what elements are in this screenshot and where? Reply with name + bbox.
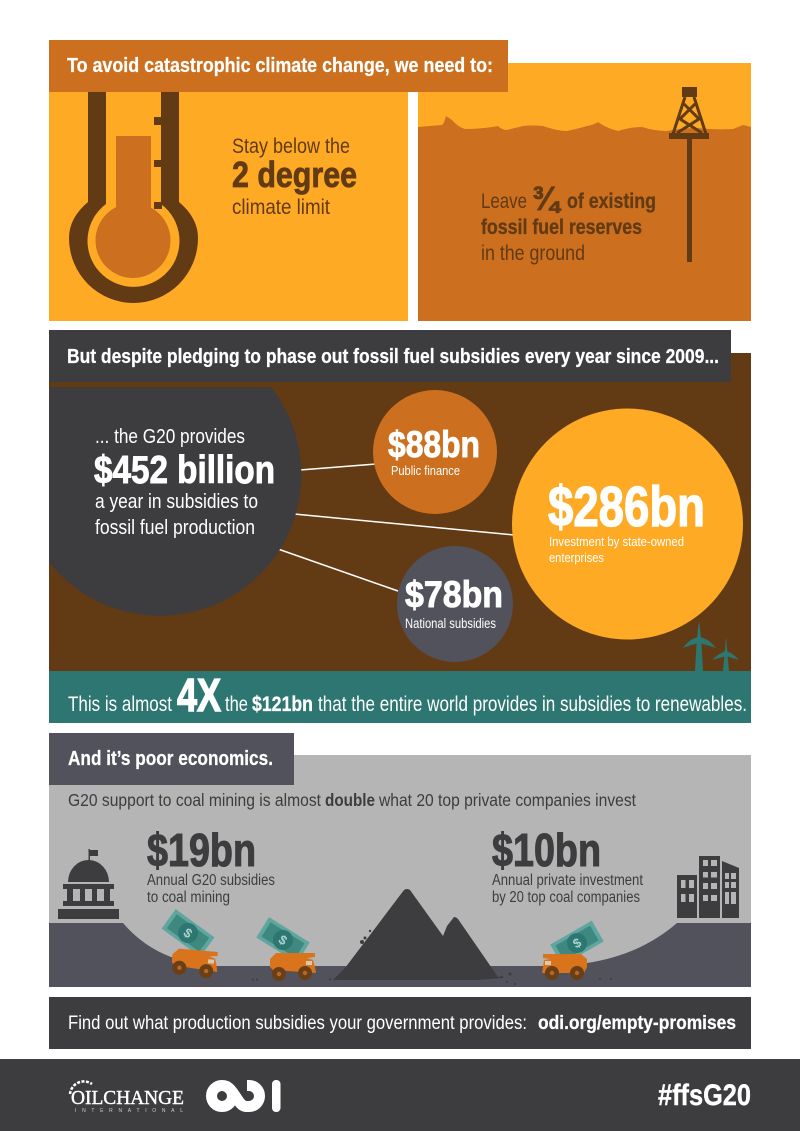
text: 19bn G20 subsidies: Annual G20 subsidies (147, 872, 275, 889)
text: 10bn private investment: Annual private investment (492, 872, 644, 889)
icon: truck carrying money, middle (256, 917, 316, 981)
text: leave three quarters of existing fossil fuel reserves in the ground: in the ground (481, 242, 585, 265)
text: leave three quarters of existing fossil fuel reserves in the ground: fossil fuel reserves (481, 216, 642, 239)
text: stay below the 2 degree climate limit: 2 degree (232, 154, 357, 195)
text: 19bn G20 subsidies: $19bn (147, 824, 256, 876)
banner: find out more: Find out what production subsidies your government provides: (68, 1013, 527, 1034)
logo: Oil Change International: INTERNATIONAL (75, 1108, 183, 1114)
icon: truck carrying money, middle: $ (276, 932, 291, 949)
icon: oil derrick (669, 87, 709, 262)
circle: 88bn public finance: $88bn (388, 424, 480, 465)
icon: thermometer (69, 92, 198, 303)
circle: 78bn national subsidies (397, 546, 513, 662)
text: stay below the 2 degree climate limit: climate limit (232, 196, 330, 219)
icon: truck carrying money, left (162, 909, 219, 979)
text: support comparison (68, 790, 636, 810)
panel: poor economics (49, 755, 751, 987)
text: 19bn G20 subsidies (147, 824, 275, 906)
heading: but despite pledging (49, 330, 731, 382)
circle: 78bn national subsidies: National subsidies (405, 616, 496, 631)
circle: 452 billion total: a year in subsidies to (95, 491, 258, 513)
banner: find out more: odi.org/empty-promises (538, 1013, 736, 1034)
circle: 286bn state-owned enterprises (512, 408, 743, 640)
footer (0, 1059, 800, 1131)
heading: and it's poor economics: And it’s poor economics. (68, 748, 273, 770)
heading: to avoid catastrophic climate change (49, 40, 508, 92)
logo: Oil Change International: OILCHANGE (71, 1087, 184, 1109)
text: leave three quarters of existing fossil fuel reserves in the ground: Leave (481, 190, 527, 213)
heading: and it's poor economics (49, 733, 294, 785)
text: 10bn private investment: $10bn (492, 824, 601, 876)
text: 10bn private investment (492, 824, 644, 906)
ground (49, 923, 751, 987)
text: 19bn G20 subsidies: to coal mining (147, 889, 230, 906)
circle: 452 billion total: fossil fuel production (95, 517, 255, 539)
panel: G20 subsidies (49, 353, 751, 671)
ground (418, 116, 751, 321)
circle: 286bn state-owned enterprises: Investment by state-owned (549, 534, 684, 549)
icon: truck carrying money, right (542, 921, 604, 980)
circle: 88bn public finance (373, 390, 497, 514)
banner: 4x renewables comparison: the (225, 693, 248, 716)
hashtag: #ffsG20 (658, 1079, 751, 1112)
icon: truck carrying money, right: $ (570, 934, 585, 951)
circle: 452 billion total: $452 billion (94, 449, 275, 492)
text: stay below the 2 degree climate limit (232, 135, 357, 219)
icon: city buildings (677, 856, 739, 918)
icon: truck carrying money, left: $ (181, 925, 196, 942)
banner: 4x renewables comparison: This is almost (68, 693, 172, 716)
circle: 452 billion total: ... the G20 provides (95, 426, 245, 448)
circle: 88bn public finance: Public finance (391, 463, 460, 478)
text: 10bn private investment: by 20 top coal companies (492, 889, 640, 906)
banner: 4x renewables comparison: 4X (177, 669, 221, 721)
panel: stay below 2 degrees (49, 63, 408, 321)
panel: leave fossil fuel reserves in the ground (418, 63, 751, 321)
circle: 78bn national subsidies: $78bn (405, 574, 503, 615)
circle: 286bn state-owned enterprises: enterprises (549, 550, 604, 565)
text: support comparison: G20 support to coal mining is almost (68, 790, 321, 810)
heading: but despite pledging: But despite pledging to phase out fossil fuel subsidies every year since 2009... (67, 346, 719, 368)
heading: to avoid catastrophic climate change: To avoid catastrophic climate change, we need to: (67, 55, 493, 77)
circle: 286bn state-owned enterprises: $286bn (548, 475, 705, 539)
text: support comparison: double (325, 790, 375, 810)
circle: 452 billion total (49, 387, 301, 616)
connector lines (278, 464, 514, 591)
icon: coal heap (252, 889, 612, 985)
text: leave three quarters of existing fossil fuel reserves in the ground (481, 180, 656, 265)
logo: Oil Change International (70, 1081, 184, 1114)
logo: ODI (212, 1080, 280, 1112)
banner: find out more (49, 997, 751, 1049)
text: support comparison: what 20 top private companies invest (378, 790, 636, 810)
banner: 4x renewables comparison: $121bn (252, 693, 313, 716)
icon: wind turbines (683, 621, 739, 671)
text: leave three quarters of existing fossil fuel reserves in the ground: ¾ (532, 180, 561, 217)
icon: government building (58, 849, 119, 919)
text: leave three quarters of existing fossil fuel reserves in the ground: of existing (567, 190, 656, 213)
banner: 4x renewables comparison (49, 669, 751, 723)
text: stay below the 2 degree climate limit: Stay below the (232, 135, 350, 158)
